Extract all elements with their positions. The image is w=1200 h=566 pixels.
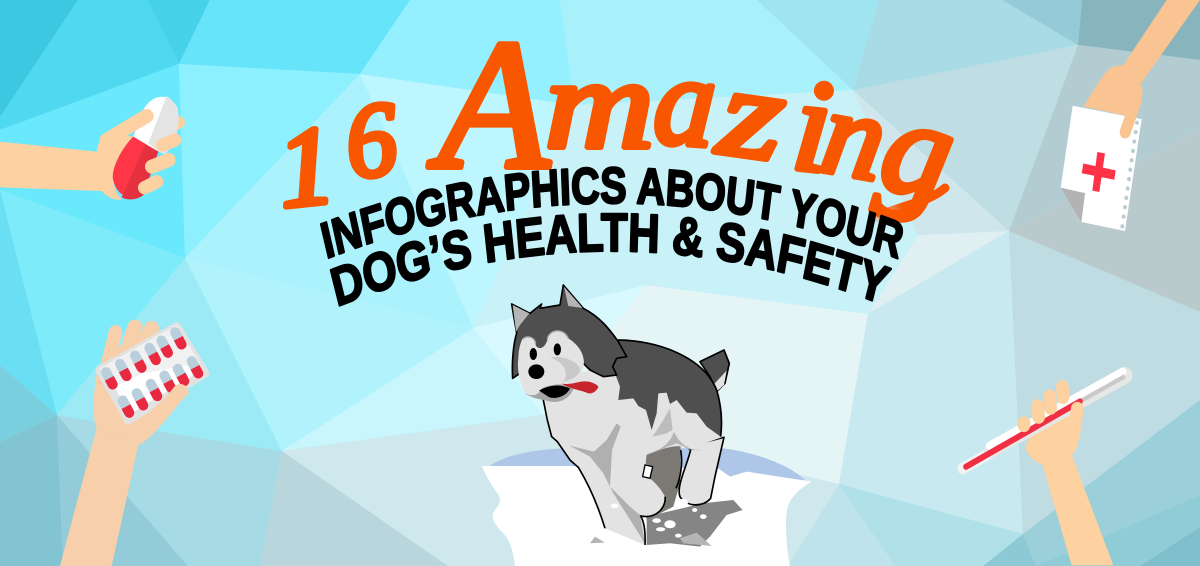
dog tail [646, 350, 729, 520]
subtitle: arched headline [320, 166, 904, 307]
title: 16 Amazing: 1 [272, 103, 340, 232]
title: 16 Amazing: a [650, 29, 721, 175]
icon: hand holding blister pack [60, 325, 205, 566]
shadow on snow [647, 500, 743, 547]
title: 16 Amazing: m [545, 34, 654, 175]
ice horizon [490, 448, 805, 480]
tongue [562, 381, 598, 393]
dog on snow [482, 285, 812, 566]
icon: hand holding thermometer [963, 372, 1125, 565]
dog back [610, 340, 721, 437]
dog eyebrows [523, 331, 568, 344]
title: 16 Amazing: z [710, 40, 793, 189]
dog head [512, 285, 627, 378]
snow mound [482, 466, 812, 566]
dog leg shadows [569, 423, 645, 544]
icon: hand holding capsule [0, 96, 185, 200]
title: 16 Amazing: 6 [340, 80, 403, 201]
icon: hand holding prescription paper [1061, 0, 1200, 231]
title: 16 Amazing: n [813, 65, 896, 206]
title: 16 Amazing [272, 1, 967, 232]
dog outline [543, 397, 665, 545]
title: 16 Amazing: i [787, 51, 839, 201]
title: 16 Amazing: A [427, 1, 551, 207]
dog body [543, 360, 722, 545]
subtitle: arched headline: DOG’S HEALTH & SAFETY [330, 212, 892, 307]
title: 16 Amazing: g [870, 70, 967, 229]
snow flecks [583, 499, 707, 538]
nose and eyes [528, 343, 561, 379]
subtitle: arched headline: INFOGRAPHICS ABOUT YOUR [320, 166, 904, 260]
